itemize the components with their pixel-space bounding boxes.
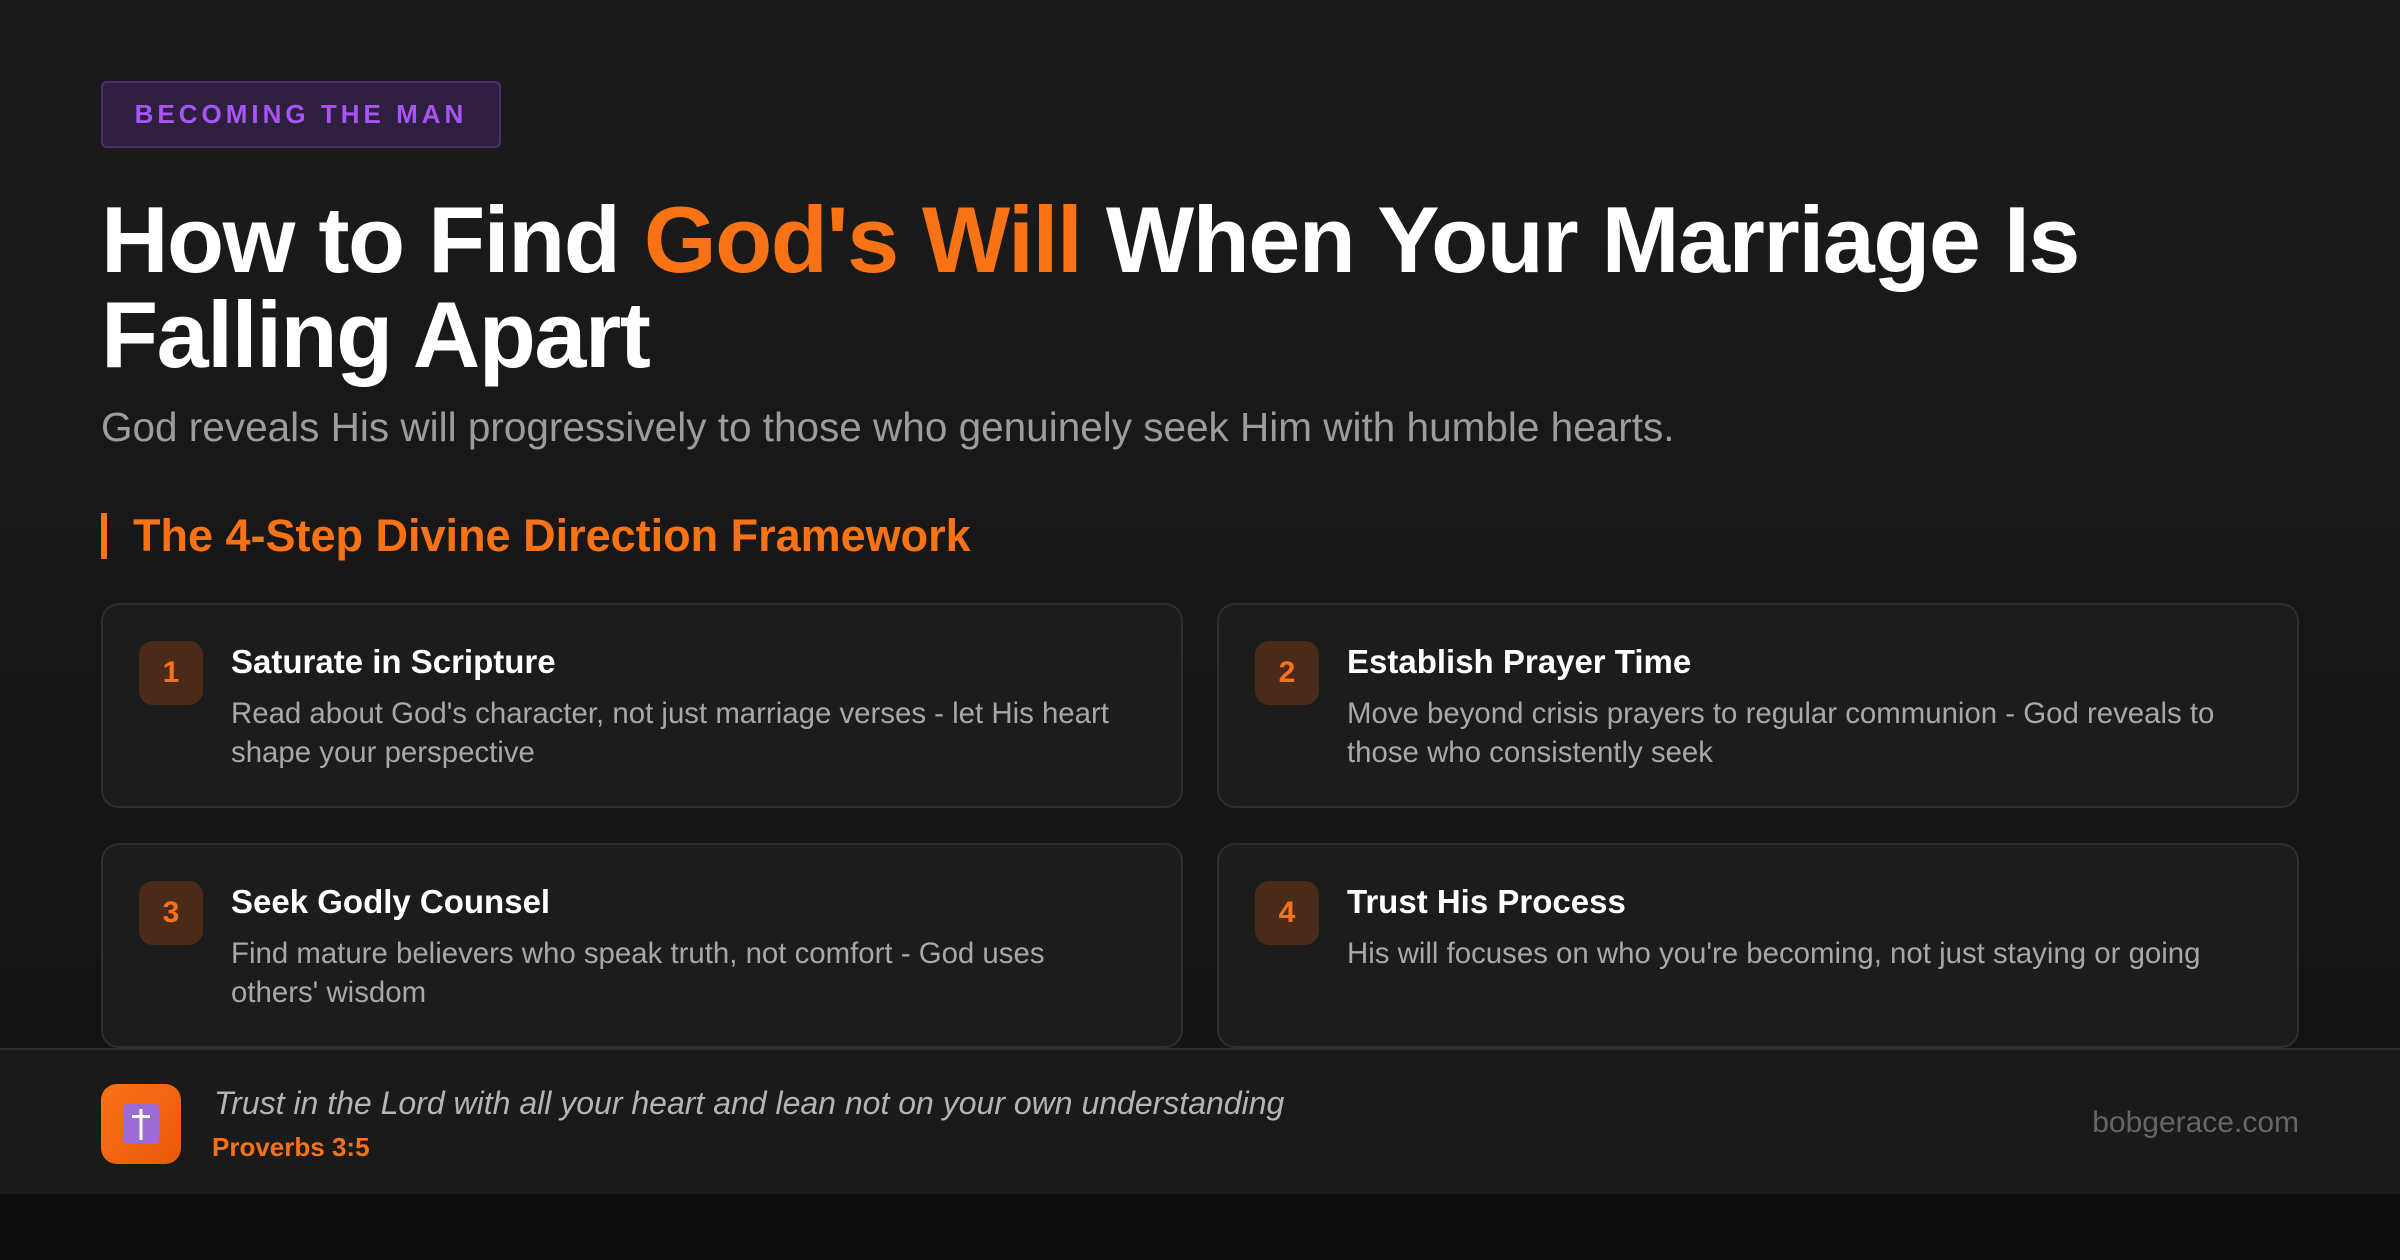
card: step 2	[1217, 603, 2299, 808]
card title 1: Saturate in Scripture	[231, 643, 556, 680]
badge 1	[139, 641, 203, 705]
footer	[0, 1048, 2400, 1194]
title: How to Find God's Will When Your Marriage Is Falling Apart	[101, 187, 2079, 387]
card text 2: Move beyond crisis prayers to regular communion - God reveals to those who consistently seek	[1347, 697, 2214, 769]
quote: Trust in the Lord with all your heart and lean not on your own understanding	[214, 1085, 1284, 1121]
tag: becoming the man	[101, 81, 501, 148]
tag: becoming the man: BECOMING THE MAN	[135, 99, 467, 129]
badge 2: 2	[1279, 656, 1295, 689]
card: step 1	[101, 603, 1183, 808]
card: step 3	[101, 843, 1183, 1048]
card title 3: Seek Godly Counsel	[231, 883, 550, 920]
card text 3: Find mature believers who speak truth, not comfort - God uses others' wisdom	[231, 937, 1045, 1009]
card text 1: Read about God's character, not just marriage verses - let His heart shape your perspective	[231, 697, 1109, 769]
card title 2: Establish Prayer Time	[1347, 643, 1691, 680]
reference: Proverbs 3:5	[212, 1132, 370, 1162]
badge 3	[139, 881, 203, 945]
card text 4: His will focuses on who you're becoming, not just staying or going	[1347, 937, 2200, 970]
subtitle: God reveals His will progressively to those who genuinely seek Him with humble hearts.	[101, 404, 1674, 450]
card title 4: Trust His Process	[1347, 883, 1626, 920]
badge 4: 4	[1279, 896, 1295, 929]
section heading: The 4-Step Divine Direction Framework	[133, 510, 971, 561]
icon: cross	[101, 1084, 181, 1164]
badge 4	[1255, 881, 1319, 945]
card: step 4	[1217, 843, 2299, 1048]
badge 1: 1	[163, 656, 179, 689]
badge 3: 3	[163, 896, 179, 929]
site: bobgerace.com	[2092, 1106, 2299, 1139]
badge 2	[1255, 641, 1319, 705]
